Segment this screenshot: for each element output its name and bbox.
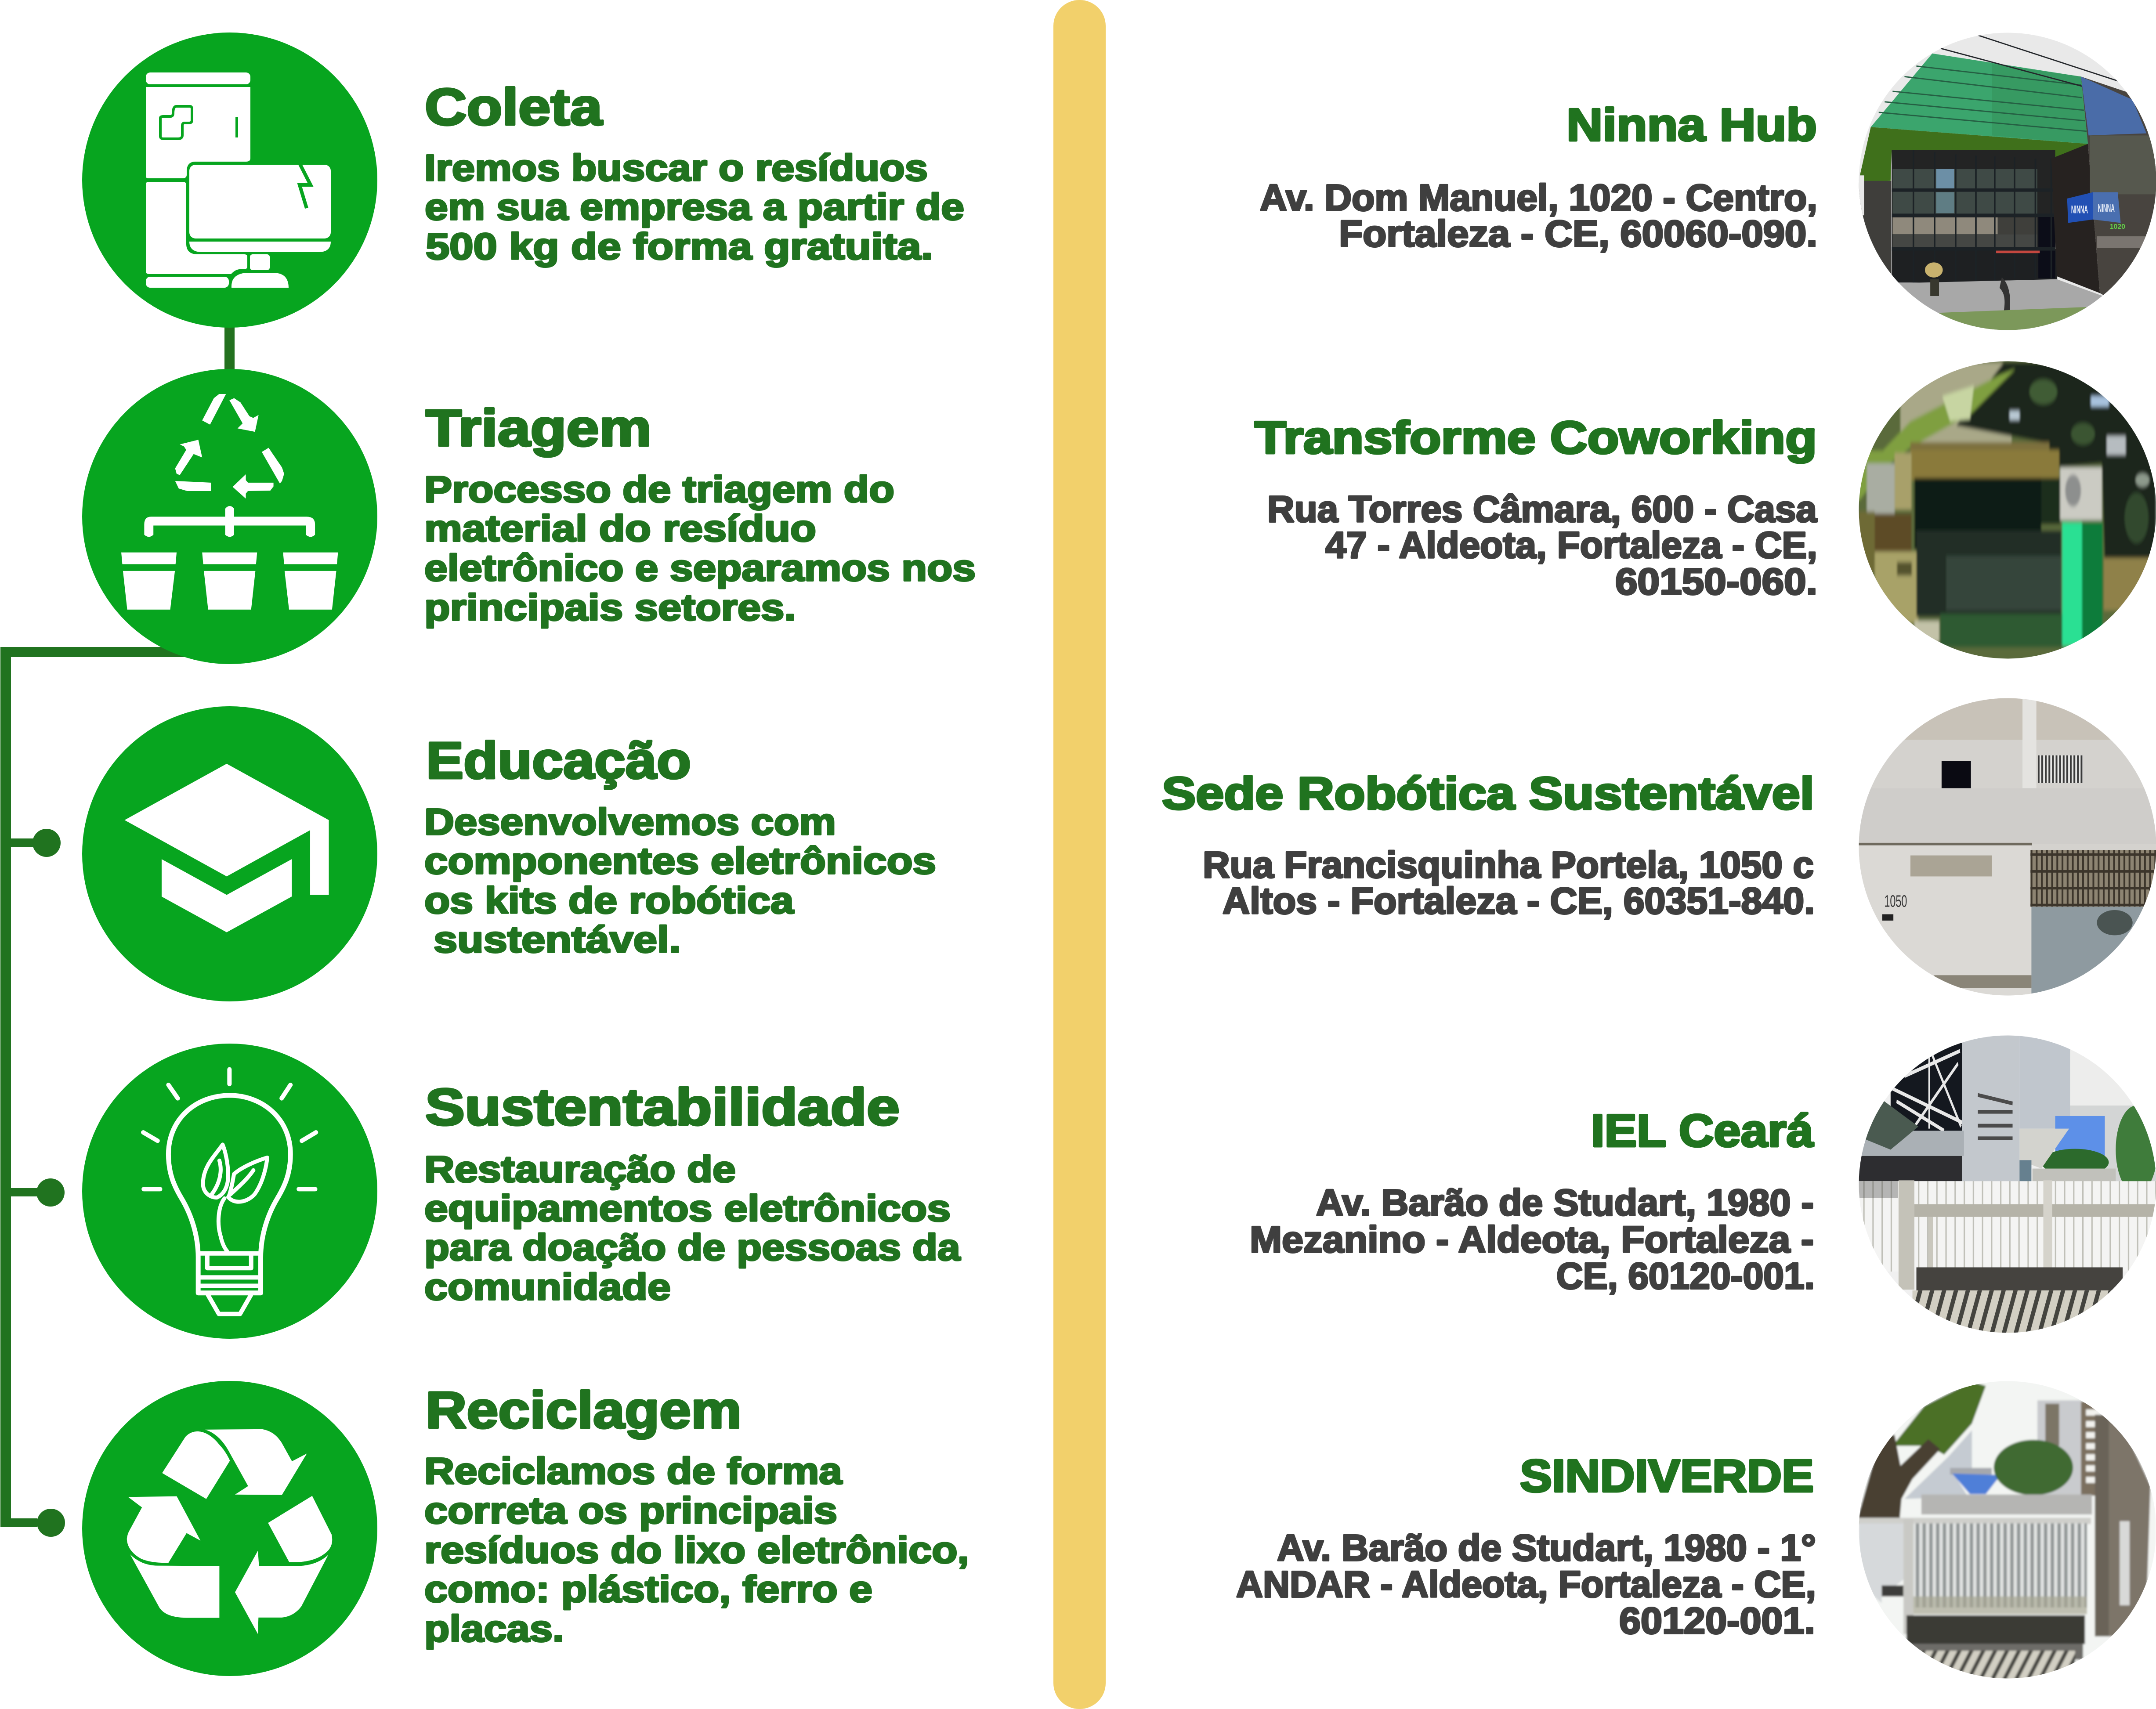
text block: Reciclagem: placas. [424, 1608, 564, 1649]
text block: Ninna Hub: Ninna Hub [1566, 100, 1817, 151]
connector: branching line from Triagem [0, 647, 198, 1537]
icon: Reciclagem, recycling symbol [82, 1381, 377, 1676]
text block: Transforme Coworking: 60150-060. [1615, 561, 1817, 602]
text block: Coleta: em sua empresa a partir de [425, 186, 964, 228]
text block: Educação: Desenvolvemos com [424, 801, 836, 842]
text block: Sustentabilidade [424, 1078, 961, 1308]
text block: Transforme Coworking: 47 - Aldeota, Fortaleza - CE, [1325, 524, 1817, 566]
text block: IEL Ceará: IEL Ceará [1591, 1106, 1814, 1156]
text block: Sustentabilidade: para doação de pessoas da [424, 1227, 961, 1268]
text block: Coleta: Iremos buscar o resíduos [424, 147, 928, 188]
photo: SINDIVERDE building and fence [1845, 1377, 2156, 1687]
connector: line between Coleta and Triagem [224, 325, 235, 371]
text block: Reciclagem: Reciclamos de forma [424, 1450, 843, 1492]
text block: Sustentabilidade: Sustentabilidade [425, 1078, 900, 1136]
icon: Educação, graduation cap [82, 706, 377, 1001]
photo: Sede Robótica Sustentável building: 1050 [1884, 892, 1907, 911]
text block: Reciclagem: resíduos do lixo eletrônico, [424, 1529, 969, 1571]
text block: Educação [424, 732, 936, 960]
text block: SINDIVERDE: ANDAR - Aldeota, Fortaleza - CE, [1236, 1564, 1816, 1605]
text block: Triagem: eletrônico e separamos nos [424, 547, 976, 589]
photo: Ninna Hub building: 1020 [2110, 223, 2125, 231]
text block: Triagem: Triagem [426, 399, 651, 457]
photo: Ninna Hub building: NINNA [2071, 204, 2088, 216]
photo: Ninna Hub building: NINNA [2098, 202, 2115, 215]
text block: Sustentabilidade: comunidade [424, 1266, 671, 1308]
text block: Sede Robótica Sustentável: Sede Robótica Sustentável [1162, 768, 1814, 819]
text block: Sustentabilidade: equipamentos eletrônicos [424, 1188, 951, 1229]
text block: IEL Ceará: Av. Barão de Studart, 1980 - [1316, 1182, 1814, 1223]
text block: Coleta [424, 78, 964, 267]
text block: Educação: Educação [426, 732, 691, 790]
text block: Transforme Coworking: Transforme Coworking [1255, 412, 1817, 463]
text block: Transforme Coworking [1255, 412, 1817, 602]
text block: IEL Ceará: Mezanino - Aldeota, Fortaleza - [1250, 1219, 1814, 1260]
text block: Sede Robótica Sustentável: Altos - Fortaleza - CE, 60351-840. [1223, 880, 1815, 921]
text block: Triagem: Processo de triagem do [424, 469, 894, 510]
icon: Coleta, fridge and monitor [82, 33, 377, 328]
text block: Transforme Coworking: Rua Torres Câmara, 600 - Casa [1267, 488, 1817, 530]
text block: Ninna Hub: Fortaleza - CE, 60060-090. [1339, 213, 1817, 254]
text block: Sustentabilidade: Restauração de [424, 1149, 736, 1190]
text block: Educação: sustentável. [434, 919, 681, 960]
text block: Reciclagem: Reciclagem [426, 1381, 742, 1439]
text block: Triagem: material do resíduo [424, 508, 816, 549]
text block: Educação: os kits de robótica [424, 880, 794, 921]
icon: Sustentabilidade, light bulb with leaves [82, 1044, 377, 1339]
text block: Educação: componentes eletrônicos [424, 840, 936, 882]
text block: SINDIVERDE [1236, 1451, 1816, 1641]
divider: yellow vertical bar [1053, 0, 1106, 1709]
photo: Sede Robótica Sustentável building [1845, 694, 2156, 1004]
text block: Sede Robótica Sustentável: Rua Francisquinha Portela, 1050 c [1203, 844, 1814, 885]
text block: IEL Ceará [1250, 1106, 1815, 1297]
text block: IEL Ceará: CE, 60120-001. [1556, 1255, 1815, 1297]
text block: Reciclagem [424, 1381, 969, 1649]
photo: IEL Ceará building and fence [1845, 1030, 2156, 1337]
icon: Triagem, recycling arrows and three bins [82, 369, 377, 664]
photo: Ninna Hub building [1859, 33, 2156, 330]
text block: Ninna Hub: Av. Dom Manuel, 1020 - Centro, [1260, 177, 1817, 218]
text block: Coleta: 500 kg de forma gratuita. [426, 226, 933, 267]
text block: Coleta: Coleta [425, 78, 603, 136]
text block: SINDIVERDE: Av. Barão de Studart, 1980 - 1° [1277, 1527, 1816, 1568]
panel: process steps [82, 33, 377, 1676]
text block: Sede Robótica Sustentável [1162, 768, 1815, 921]
text block: Triagem [424, 399, 976, 628]
text block: SINDIVERDE: SINDIVERDE [1520, 1451, 1814, 1502]
text block: Reciclagem: correta os principais [424, 1490, 837, 1531]
text block: Triagem: principais setores. [424, 587, 796, 628]
text block: Ninna Hub [1260, 100, 1817, 254]
text block: SINDIVERDE: 60120-001. [1619, 1600, 1815, 1641]
text block: Reciclagem: como: plástico, ferro e [424, 1568, 872, 1610]
photo: Transforme Coworking entrance [1845, 358, 2156, 665]
